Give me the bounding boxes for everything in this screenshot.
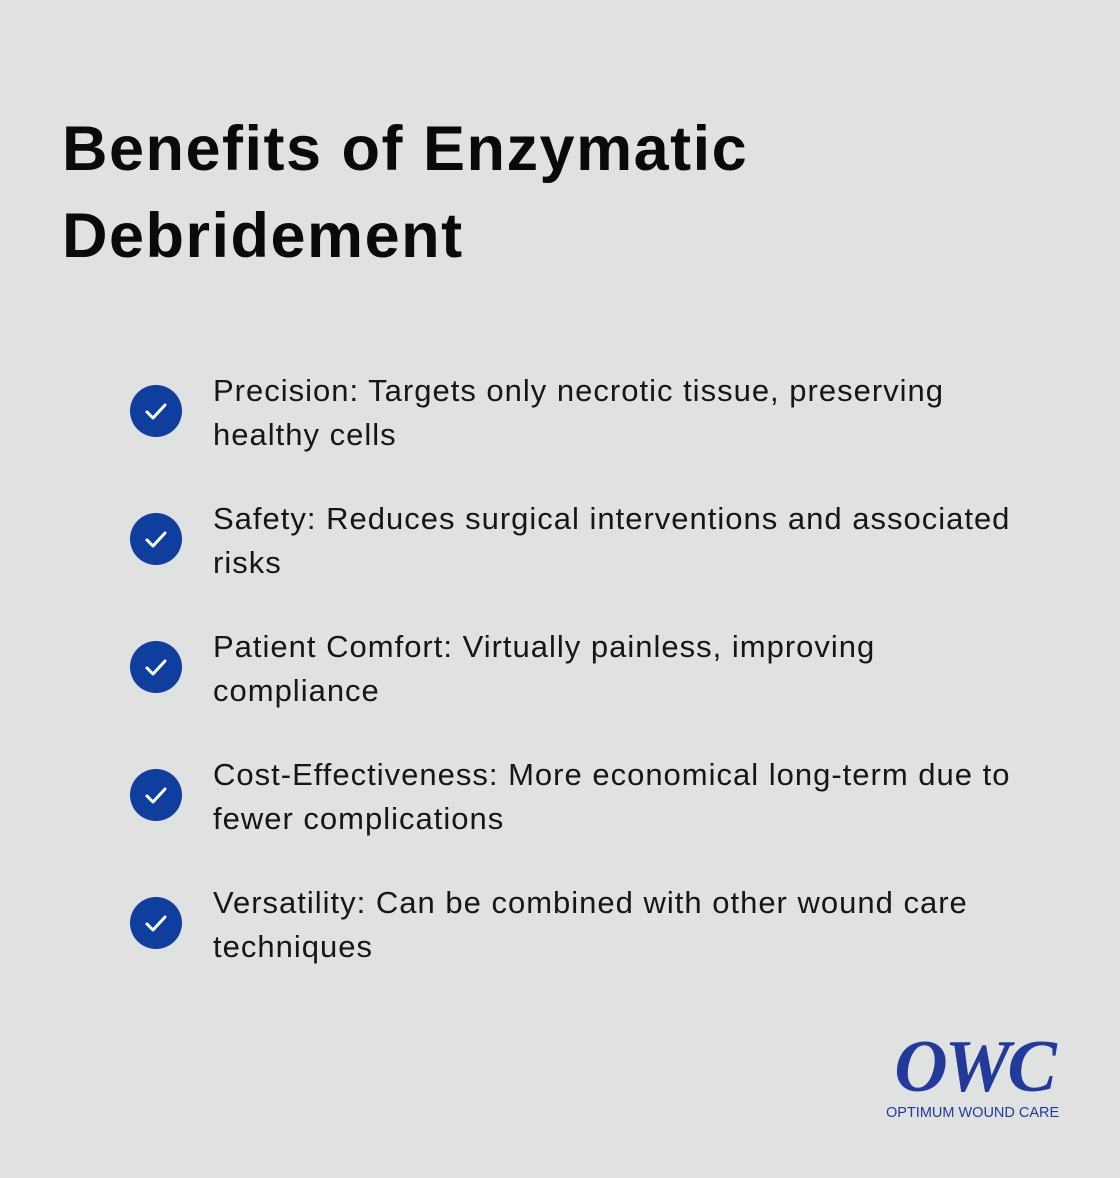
title: Debridement (62, 201, 464, 271)
icon: check (130, 385, 182, 437)
text: risks (213, 545, 282, 580)
text: fewer complications (213, 801, 504, 836)
text: Precision: Targets only necrotic tissue, preserving (213, 373, 944, 408)
item: comfort (130, 629, 875, 708)
item: precision (130, 373, 944, 452)
logo: OWC (894, 1026, 1054, 1108)
text (213, 629, 875, 708)
text: healthy cells (213, 417, 397, 452)
text: Safety: Reduces surgical interventions and associated (213, 501, 1010, 536)
item: cost (130, 757, 1010, 836)
title (62, 114, 748, 271)
text: Cost-Effectiveness: More economical long-term due to (213, 757, 1010, 792)
item: versatility (130, 885, 968, 964)
text: Versatility: Can be combined with other wound care (213, 885, 968, 920)
text: compliance (213, 673, 380, 708)
text (213, 373, 944, 452)
icon: check (130, 769, 182, 821)
text (213, 885, 968, 964)
text: Patient Comfort: Virtually painless, improving (213, 629, 875, 664)
text: techniques (213, 929, 373, 964)
item: safety (130, 501, 1010, 580)
icon: check (130, 641, 182, 693)
text (213, 757, 1010, 836)
icon: check (130, 897, 182, 949)
icon: check (130, 513, 182, 565)
logo: OPTIMUM WOUND CARE (886, 1105, 1059, 1121)
title: Benefits of Enzymatic (62, 114, 748, 184)
text (213, 501, 1010, 580)
